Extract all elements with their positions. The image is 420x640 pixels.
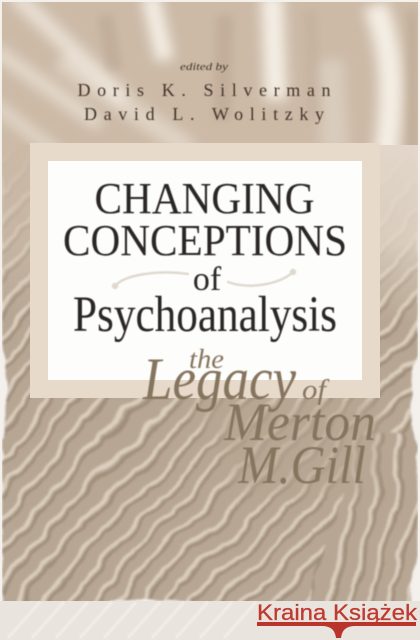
left strip fade (2, 143, 30, 313)
title line: Psychoanalysis: Psychoanalysis (73, 287, 337, 343)
subtitle word: the: the (189, 344, 224, 374)
title line: CONCEPTIONS: CONCEPTIONS (63, 216, 347, 265)
decorative flourish (113, 270, 295, 288)
logo: Kraina Książek: Kraina Książek (257, 600, 418, 625)
bottom banner (0, 600, 420, 640)
title panel: white card (48, 161, 362, 380)
title line: CHANGING: CHANGING (94, 174, 314, 223)
subtitle word: M.Gill: M.Gill (237, 435, 366, 495)
subtitle: the Legacy of Merton M. Gill (142, 344, 376, 495)
logo: open book line (257, 622, 416, 638)
right strip fade (380, 143, 418, 323)
banner faded streaks (8, 602, 256, 638)
subtitle word: of: of (302, 374, 330, 406)
title panel: tan frame (30, 143, 380, 398)
edited by: edited by (180, 61, 228, 73)
sand background: rippled lower area (2, 140, 418, 610)
title line: of: of (193, 261, 222, 298)
editor name: David L. Wolitzky: David L. Wolitzky (84, 104, 324, 124)
subtitle word: Legacy: Legacy (142, 346, 296, 412)
editors block (78, 61, 330, 124)
title text block (63, 174, 347, 343)
editor name: Doris K. Silverman: Doris K. Silverman (78, 80, 330, 100)
sand background: upper area with light streaks (2, 2, 418, 145)
subtitle word: Merton: Merton (223, 392, 376, 452)
calm patch behind subtitle (180, 400, 380, 492)
banner background (0, 601, 420, 640)
